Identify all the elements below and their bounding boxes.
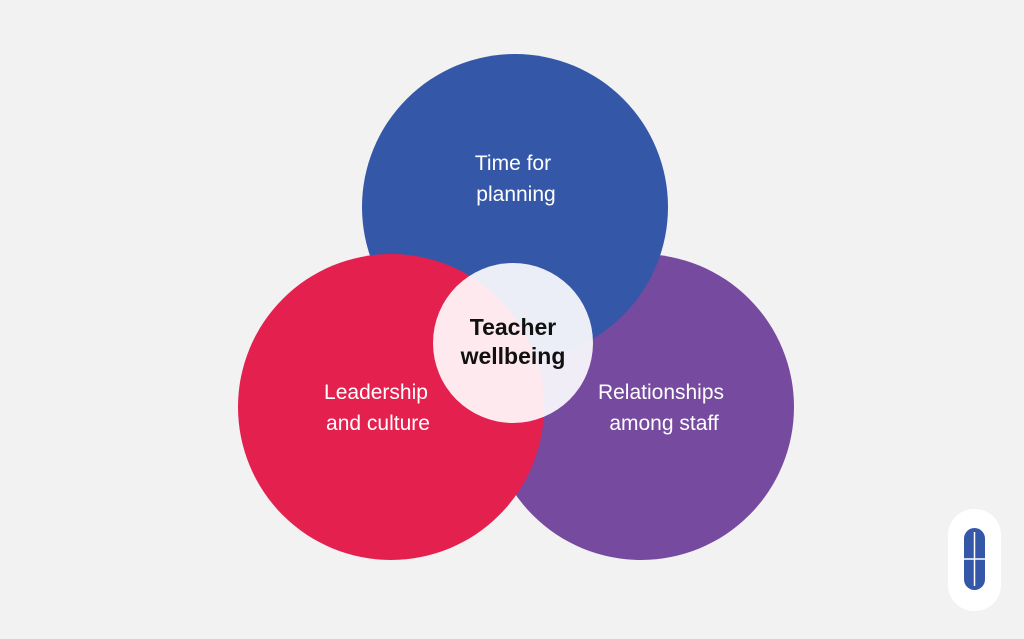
- circle: relationships among staff: [488, 254, 794, 560]
- center: teacher wellbeing: [433, 263, 593, 423]
- logo: [948, 509, 1001, 611]
- label: leadership: Leadership: [324, 381, 428, 404]
- label: time for planning: planning: [476, 183, 556, 206]
- label: relationships: among staff: [609, 412, 719, 435]
- label: leadership: and culture: [326, 412, 430, 435]
- circle: leadership and culture: [238, 254, 544, 560]
- center: teacher wellbeing: Teacher: [470, 314, 556, 340]
- label: time for planning: Time for: [475, 152, 551, 175]
- circle: time for planning: [362, 54, 668, 360]
- label: relationships: Relationships: [598, 381, 724, 404]
- center: teacher wellbeing: wellbeing: [460, 343, 565, 369]
